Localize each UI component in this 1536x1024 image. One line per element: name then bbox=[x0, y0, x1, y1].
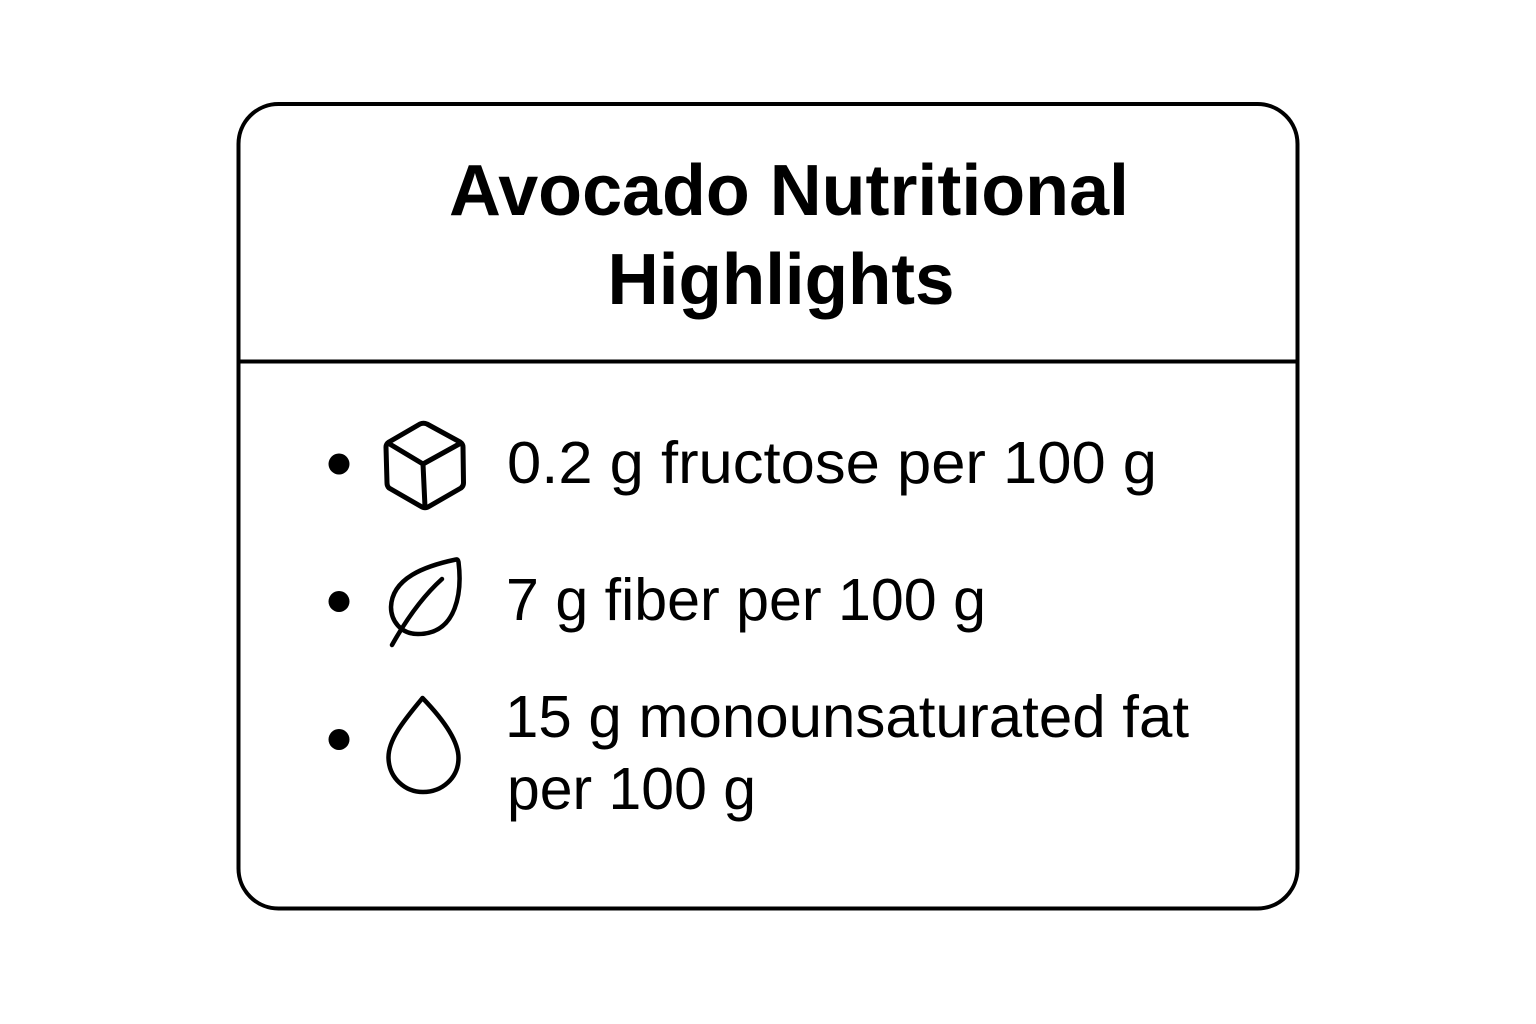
title: Avocado Nutritional bbox=[449, 151, 1129, 231]
list item: monounsaturated fat: per 100 g bbox=[507, 756, 756, 822]
list item: monounsaturated fat: 15 g monounsaturated fat bbox=[505, 684, 1189, 750]
list item: monounsaturated fat bbox=[328, 684, 1189, 822]
icon: leaf bbox=[391, 559, 459, 645]
icon: sugar cube bbox=[386, 423, 464, 508]
icon: drop bbox=[388, 698, 458, 792]
panel: nutrition card bbox=[238, 104, 1298, 908]
title bbox=[449, 151, 1129, 320]
list item: fiber bbox=[328, 559, 986, 645]
list item: fiber: 7 g fiber per 100 g bbox=[506, 567, 986, 633]
title: Highlights bbox=[608, 240, 954, 320]
list item: fructose bbox=[328, 423, 1157, 508]
list item: fructose: 0.2 g fructose per 100 g bbox=[507, 430, 1157, 496]
